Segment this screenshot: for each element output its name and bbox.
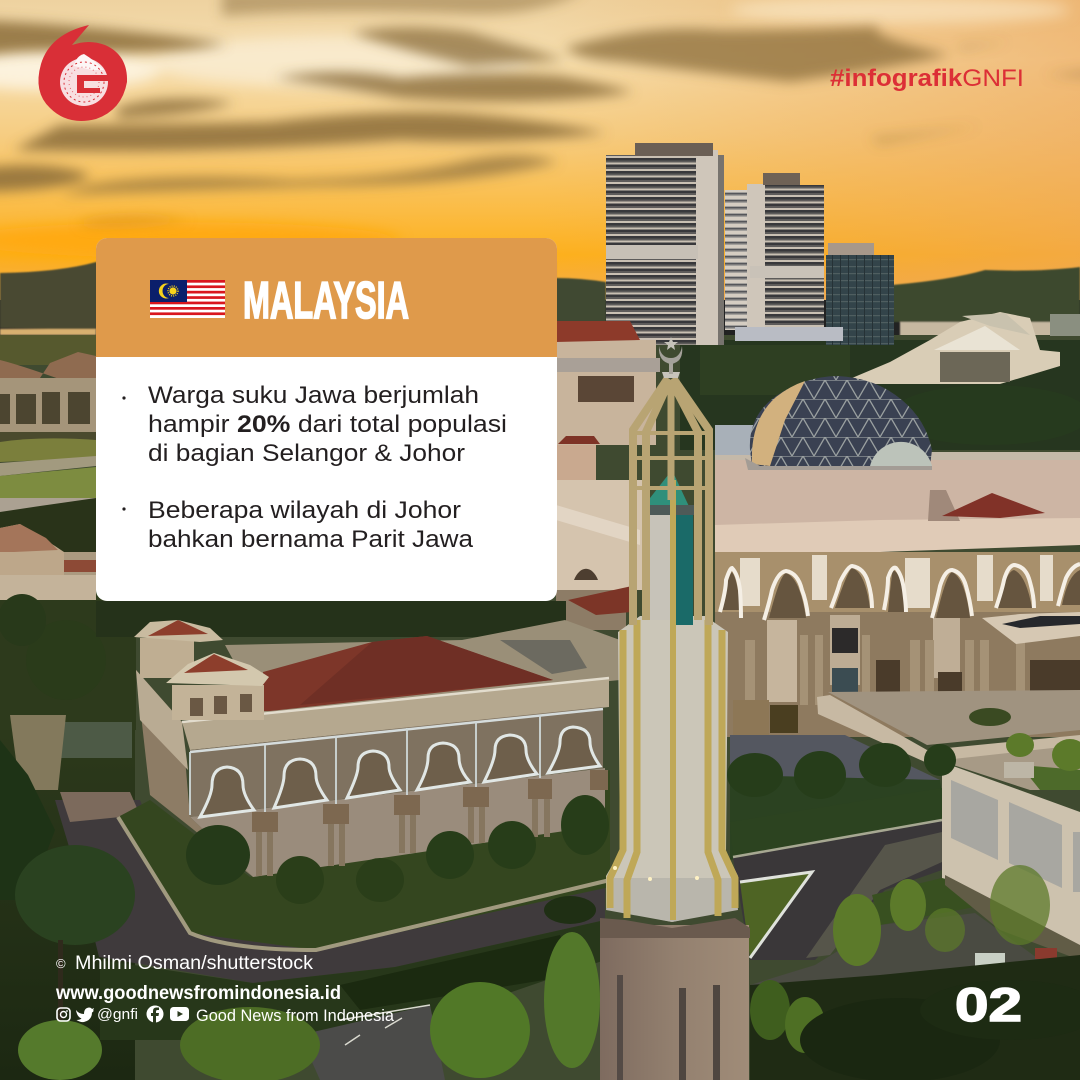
text block: first bullet: Warga suku Jawa berjumlah [148,382,479,409]
photo: left background buildings and lawns [0,352,566,790]
text block: second bullet: Beberapa wilayah di Johor [148,497,461,524]
photo: far pavilion right [700,312,1080,445]
photo credit: Mhilmi Osman/shutterstock [75,953,314,974]
heading: Malaysia: MALAYSIA [243,272,409,330]
photo: ground base tones [0,335,1080,1080]
photo: road and lawn by left palace [55,770,610,1080]
logo: GNFI red swirl badge [38,25,127,121]
icon: youtube [170,1007,189,1021]
photo: palace pavilion behind minaret [556,321,660,630]
page number: 02 [955,978,1022,1031]
icon: instagram [57,1008,70,1021]
photo: trees in the foreground left [0,740,609,1080]
social row [57,1006,395,1025]
photo: distant hills [0,262,1080,340]
photo: geodesic dome [715,376,932,470]
text block: second bullet [122,497,473,553]
panel: Malaysia card [96,238,557,601]
photo credit: © [56,956,66,971]
photo: sky with sunset clouds [0,0,1080,300]
text block: second bullet: bahkan bernama Parit Jawa [148,526,473,553]
photo: minaret with crescent [600,337,750,1080]
card header band [96,238,557,357]
handle: gnfi: @gnfi [97,1006,138,1023]
website url: www.goodnewsfromindonesia.id [55,983,341,1004]
photo: left palace building [134,620,620,877]
page name: Good News from Indonesia [196,1006,395,1025]
photo: high-rise towers [606,143,894,345]
icon: facebook [146,1006,164,1023]
text block: first bullet [122,382,507,467]
photo: right lower annex, roads and trees [727,733,1080,1080]
text block: first bullet: di bagian Selangor & Johor [148,440,465,467]
photo: right mosque main building [715,452,1080,860]
text block: first bullet: hampir 20% dari total populasi [148,411,507,438]
icon: Malaysian flag [150,280,225,318]
hashtag: infografikGNFI: #infografik GNFI [830,65,1024,92]
icon: twitter [76,1008,94,1022]
card body [96,238,557,601]
